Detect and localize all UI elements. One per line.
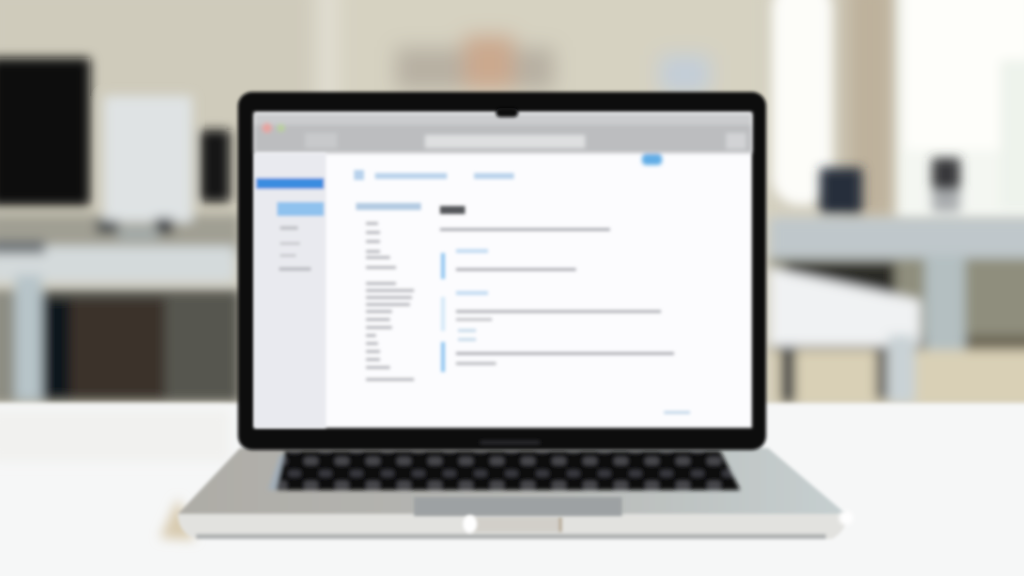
screen bezel	[238, 92, 766, 450]
laptop shadow	[160, 498, 195, 540]
table of contents	[356, 203, 421, 381]
laptop base	[178, 448, 846, 539]
sidebar	[254, 153, 326, 428]
corner glint	[839, 511, 853, 525]
keyboard	[268, 451, 740, 490]
article text	[440, 228, 690, 414]
article heading	[440, 206, 465, 214]
front indicator light	[463, 515, 477, 533]
desk surface	[0, 403, 1024, 576]
left office furniture	[0, 58, 240, 402]
trackpad	[414, 497, 622, 516]
hinge	[480, 441, 540, 444]
laptop	[160, 92, 853, 540]
camera notch	[496, 108, 518, 117]
screen	[254, 112, 752, 428]
browser toolbar	[254, 113, 752, 165]
right office furniture	[770, 158, 1024, 405]
breadcrumb	[354, 170, 514, 180]
